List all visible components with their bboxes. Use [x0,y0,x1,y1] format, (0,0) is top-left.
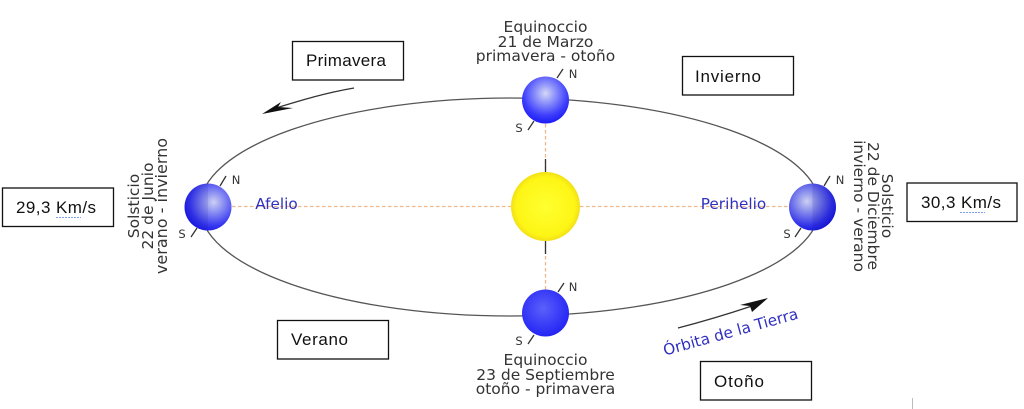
box: Verano [278,320,388,359]
label: solstice June: Solsticio [125,174,143,238]
box: Primavera: Primavera [306,51,387,70]
label: equinox September: otoño - primavera [476,380,615,398]
planet: left solstice: S [178,227,186,241]
label: solstice June: verano - invierno [152,138,171,274]
label: solstice June [125,138,171,274]
axis dashed lines [232,124,788,290]
box: Otoño [700,362,812,400]
box: Primavera [292,42,404,80]
label: equinox September [476,351,615,398]
planet: bottom equinox [515,280,577,348]
box: speed at perihelion: 30,3 Km/s [921,193,1001,212]
arrow: top orbit direction [262,88,354,114]
planet: right solstice: N [836,173,844,187]
label: Afelio: Afelio [255,195,298,213]
box: Invierno: Invierno [695,67,761,86]
label: solstice June: 22 de Junio [139,163,157,249]
label: solstice December: 22 de Diciembre [864,142,882,270]
label: solstice December [850,140,896,272]
planet: bottom equinox: S [515,334,523,348]
planet: right solstice: S [783,227,791,241]
planet: left solstice [178,173,240,241]
label: equinox March [476,18,615,65]
label: solstice December: Solsticio [878,174,896,238]
planet: top equinox: N [569,67,577,81]
label: equinox September: 23 de Septiembre [476,366,615,384]
planet: right solstice [783,173,844,241]
planet: bottom equinox: N [569,280,577,294]
label: Perihelio: Perihelio [701,195,766,213]
box: speed at perihelion [907,183,1017,222]
label: equinox September: Equinoccio [504,351,587,369]
label: solstice December: invierno - verano [850,140,868,272]
label: equinox March: 21 de Marzo [498,33,593,51]
arrow: bottom orbit direction [678,298,768,328]
planet: top equinox: S [515,121,523,135]
box: speed at aphelion [2,188,114,226]
label: equinox March: Equinoccio [504,18,587,36]
box: speed at aphelion: 29,3 Km/s [16,198,96,217]
label: orbit of Earth: Órbita de la Tierra [661,304,800,359]
orbit ellipse [200,98,820,316]
box: Invierno [682,56,794,95]
sun [511,159,580,254]
box: Verano: Verano [291,330,348,349]
planet: left solstice: N [232,173,240,187]
planet: top equinox [515,67,577,135]
label: equinox March: primavera - otoño [476,47,615,65]
box: Otoño: Otoño [714,372,764,391]
